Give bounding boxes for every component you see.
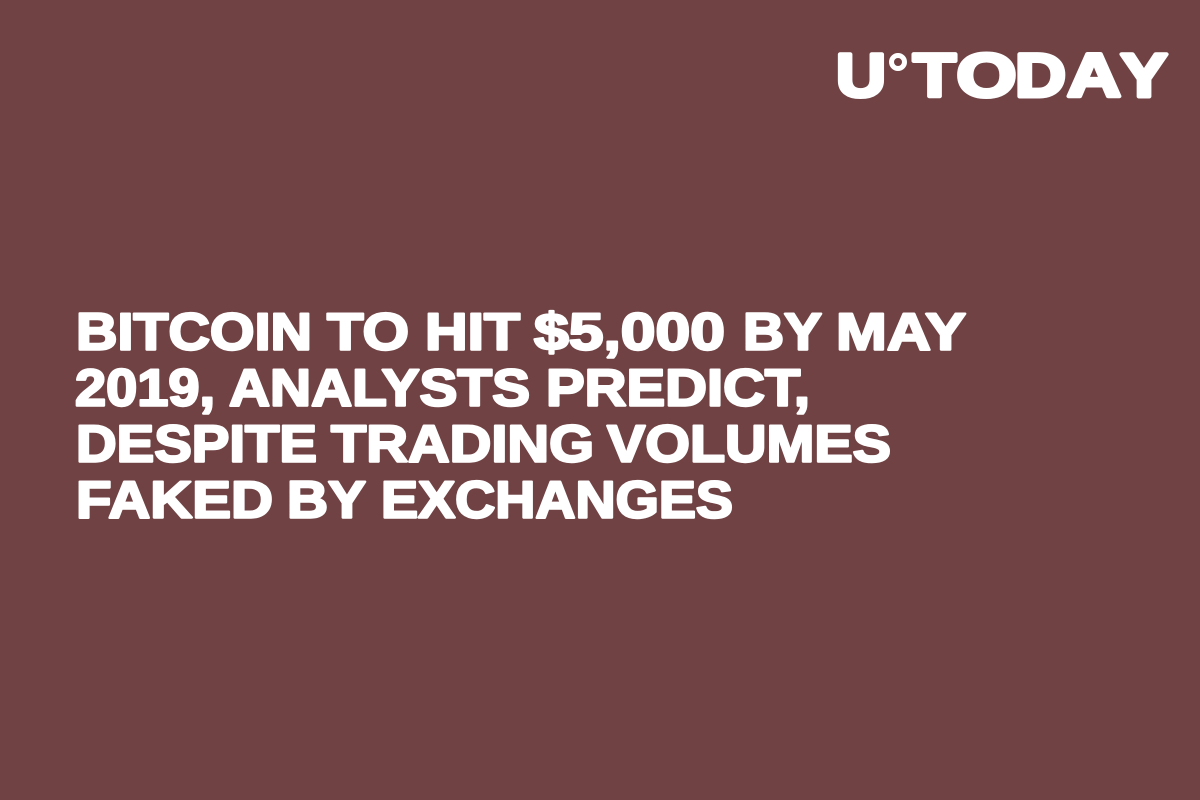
logo: U.Today: O [956, 42, 1016, 110]
logo: U.Today [836, 42, 1168, 110]
title: BY [287, 471, 366, 529]
title: TRADING [331, 415, 594, 473]
logo: U.Today: Y [1120, 42, 1168, 110]
title: TO [327, 303, 409, 361]
logo: U.Today: T [913, 42, 956, 110]
title: EXCHANGES [381, 471, 733, 529]
logo: U.Today: A [1067, 42, 1121, 110]
title: DESPITE [76, 415, 317, 473]
title: FAKED [76, 471, 273, 529]
title: BY [743, 303, 822, 361]
title: MAY [836, 303, 966, 361]
title: HIT [425, 303, 520, 361]
title: BITCOIN [76, 303, 312, 361]
title: $5,000 [534, 303, 725, 361]
logo: U.Today: U [836, 42, 886, 110]
logo: U.Today: D [1015, 42, 1066, 110]
title: ANALYSTS [229, 359, 530, 417]
title: 2019, [75, 359, 215, 417]
title [75, 303, 966, 529]
title: PREDICT, [546, 359, 810, 417]
title: VOLUMES [607, 415, 891, 473]
